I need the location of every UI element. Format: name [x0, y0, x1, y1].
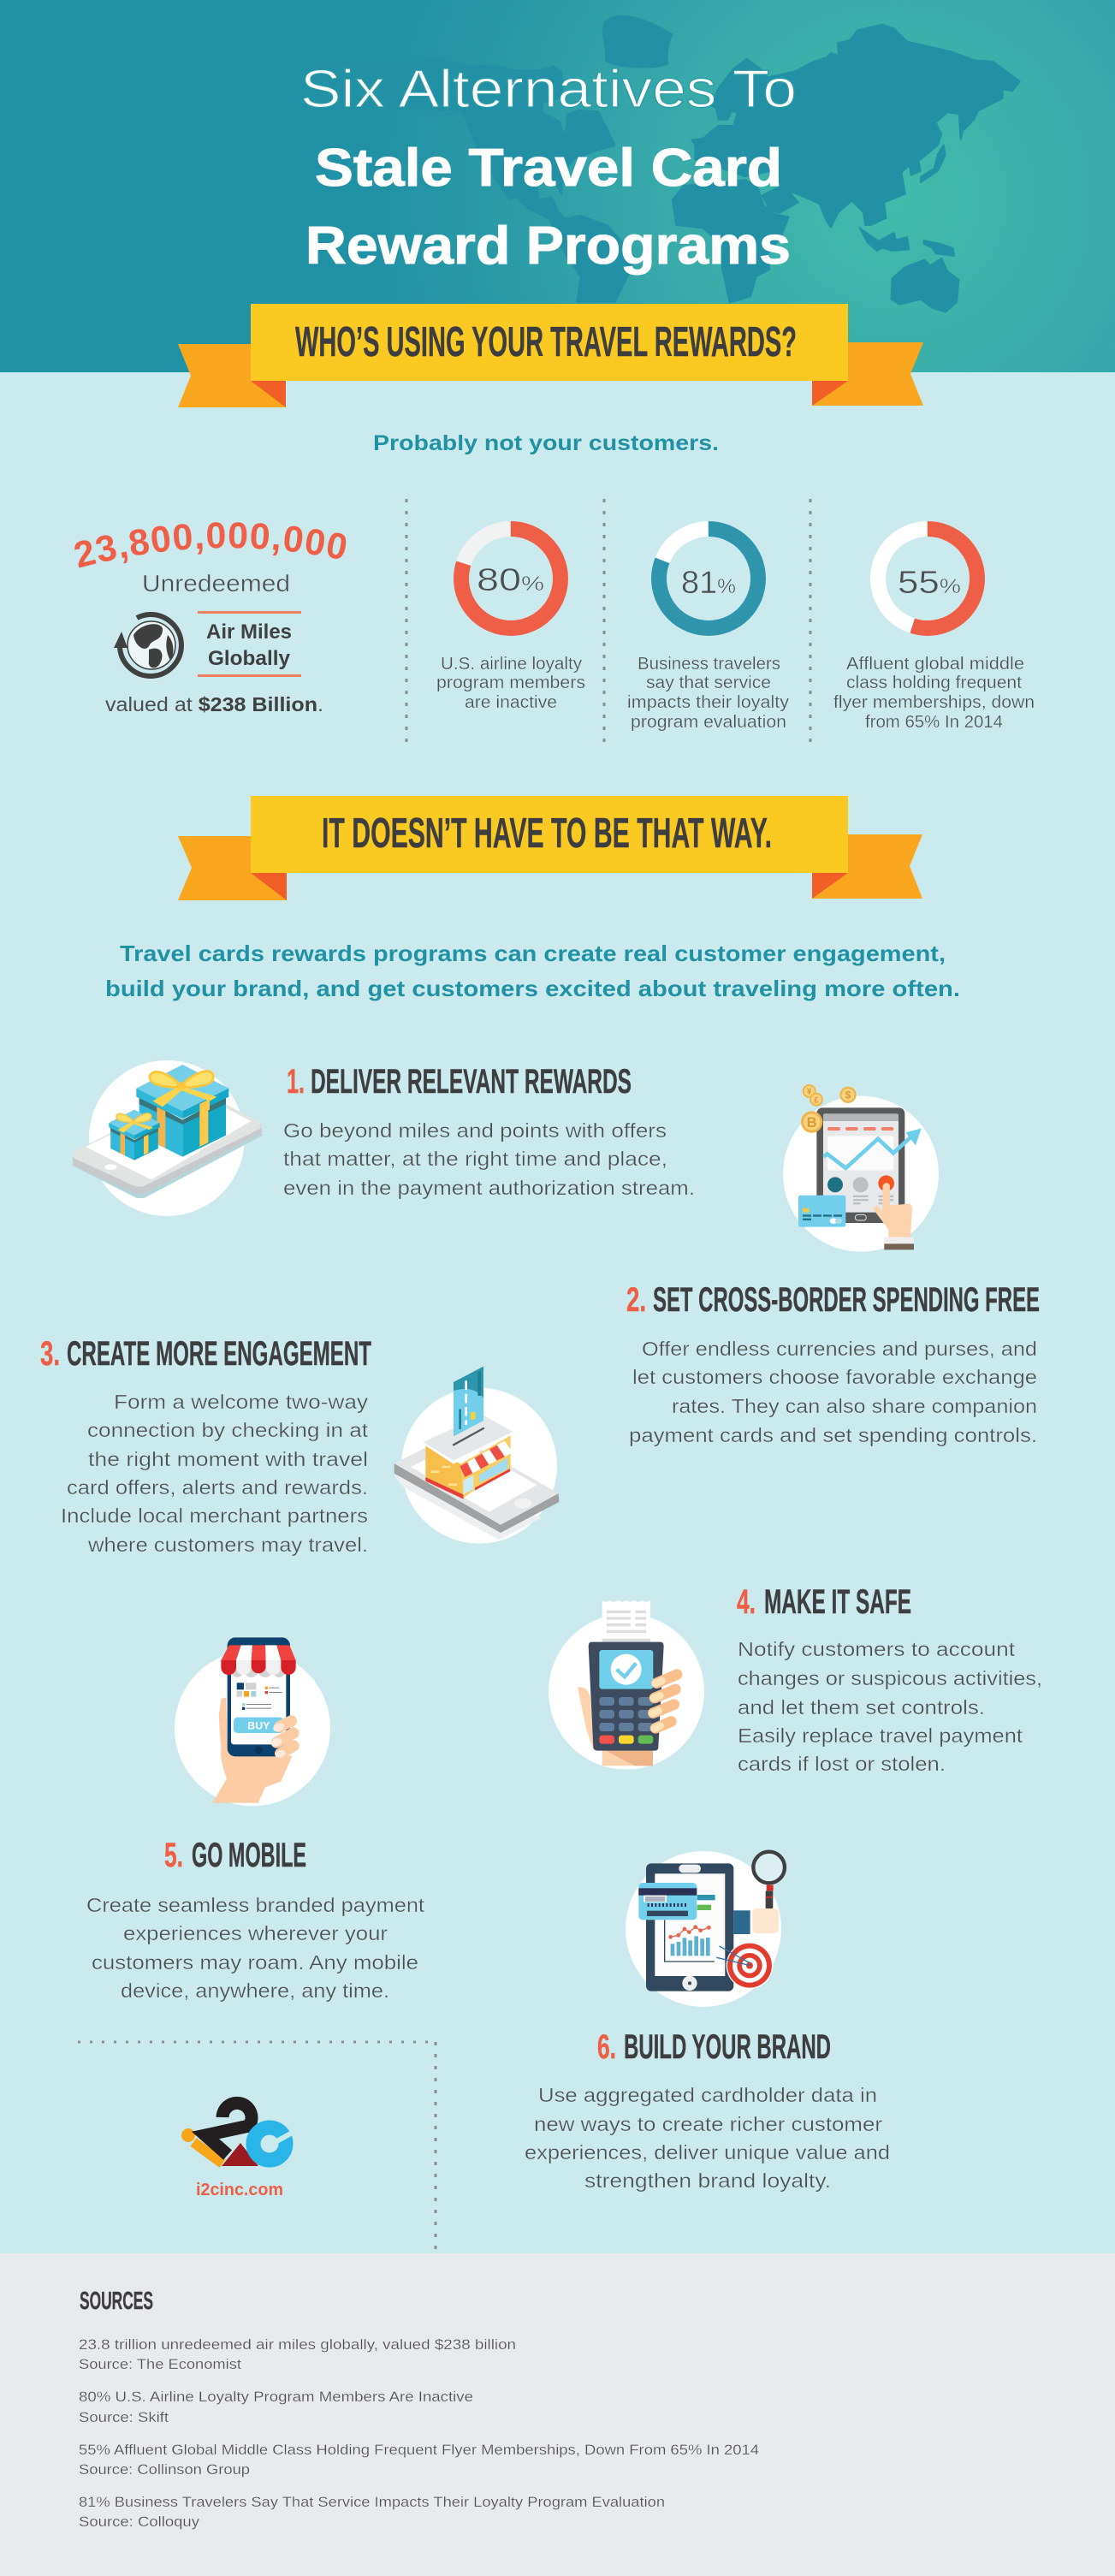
stat: 55%: class holding frequent — [846, 674, 1022, 692]
section 4: make it safe: Easily replace travel payment — [738, 1724, 1023, 1747]
section 1: deliver relevant rewards: DELIVER RELEVANT REWARDS — [311, 1063, 632, 1101]
section 3: create more engagement: 3. — [40, 1335, 60, 1373]
stat: 80% — [436, 529, 585, 712]
fingers — [652, 1675, 677, 1729]
stat: 55%: from 65% In 2014 — [865, 713, 1003, 732]
section 2: set cross-border spending free: 2. — [626, 1281, 646, 1319]
section 1: deliver relevant rewards: even in the payment authorization stream. — [283, 1177, 695, 1199]
source list: Source: Collinson Group — [79, 2461, 250, 2478]
donut chart 81 — [659, 529, 758, 628]
section 2: set cross-border spending free: let customers choose favorable exchange — [632, 1366, 1037, 1388]
stat: 55%: 55 % — [898, 565, 961, 600]
logo: i2c — [181, 2103, 295, 2199]
section 5: go mobile: GO MOBILE — [192, 1837, 306, 1874]
stat: 81%: program evaluation — [631, 713, 786, 732]
donut chart 55 — [878, 529, 977, 628]
section 3: create more engagement: Form a welcome two-way — [114, 1391, 369, 1413]
section 4: make it safe: and let them set controls. — [738, 1696, 985, 1718]
section 6: build your brand: experiences, deliver unique value and — [525, 2141, 890, 2163]
title: Six Alternatives To — [300, 60, 797, 119]
awning — [221, 1645, 296, 1675]
header panel — [0, 0, 1115, 372]
intro paragraph: Travel cards rewards programs can create real customer engagement, — [120, 941, 946, 966]
coins — [801, 1084, 857, 1133]
title — [300, 60, 797, 276]
big gift — [136, 1065, 228, 1157]
source list: Source: Colloquy — [79, 2514, 200, 2530]
section 1: deliver relevant rewards: that matter, at the right time and place, — [283, 1148, 667, 1170]
banner: it doesn't have to be that way: IT DOESN’T HAVE TO BE THAT WAY. — [322, 810, 772, 857]
section 1: deliver relevant rewards — [283, 1063, 695, 1199]
source list: 81% Business Travelers Say That Service Impacts Their Loyalty Program Evaluation — [79, 2494, 665, 2510]
icon: globe with arrow — [114, 614, 181, 676]
stat: 81%: say that service — [646, 674, 771, 692]
coins: B — [807, 1114, 817, 1131]
icon: payment terminal with receipt — [549, 1600, 704, 1770]
source list: 55% Affluent Global Middle Class Holding Frequent Flyer Memberships, Down From 65% In 2014 — [79, 2442, 759, 2458]
section 6: build your brand: 6. — [597, 2028, 616, 2066]
stat: 80%: 80 % — [477, 562, 544, 597]
arched number: 23,800,000,000 — [74, 522, 346, 568]
stat: 55%: Affluent global middle — [846, 655, 1024, 674]
coins: ¥ — [807, 1088, 812, 1097]
fingers — [276, 1721, 294, 1754]
subheading: probably not your customers: Probably not your customers. — [373, 431, 719, 455]
section 6: build your brand: BUILD YOUR BRAND — [624, 2028, 831, 2066]
section 5: go mobile: 5. — [164, 1837, 183, 1874]
air miles globally label — [198, 611, 301, 677]
section 6: build your brand: Use aggregated cardholder data in — [538, 2084, 877, 2106]
section 3: create more engagement: Include local merchant partners — [61, 1505, 368, 1527]
logo: i2c: i2cinc.com — [196, 2181, 283, 2199]
source list: Source: The Economist — [79, 2356, 241, 2372]
stat: 80%: U.S. airline loyalty — [441, 655, 582, 674]
section 6: build your brand: new ways to create richer customer — [534, 2113, 882, 2135]
section 4: make it safe: 4. — [737, 1583, 756, 1621]
section 5: go mobile: Create seamless branded payment — [86, 1894, 425, 1916]
icon: hand holding phone with awning — [175, 1637, 330, 1806]
stat: 81%: 81% — [681, 565, 736, 600]
air miles globally label: Air Miles — [206, 620, 292, 644]
source list: 80% U.S. Airline Loyalty Program Members Are Inactive — [79, 2389, 473, 2405]
awning — [460, 1440, 513, 1477]
section 4: make it safe: MAKE IT SAFE — [764, 1583, 911, 1621]
unredeemed label: Unredeemed — [142, 570, 290, 597]
stat: 81%: impacts their loyalty — [627, 693, 789, 712]
section 3: create more engagement: CREATE MORE ENGAGEMENT — [67, 1335, 371, 1373]
donut chart 80 — [461, 529, 560, 628]
section 2: set cross-border spending free: payment cards and set spending controls. — [629, 1424, 1037, 1446]
stat: 80%: program members — [436, 674, 585, 692]
target — [716, 1942, 773, 1989]
section 3: create more engagement — [40, 1335, 371, 1556]
credit card — [454, 1367, 483, 1436]
stat: 81%: Business travelers — [638, 655, 780, 674]
panel: sources — [0, 2253, 1115, 2576]
icon: tablet with analytics, magnifier and target — [626, 1851, 785, 2007]
title: Reward Programs — [305, 217, 791, 276]
section 3: create more engagement: the right moment with travel — [88, 1448, 368, 1470]
icon: storefront on phone with card — [394, 1367, 559, 1544]
stat: 80%: are inactive — [465, 693, 557, 712]
section 1: deliver relevant rewards: 1. — [287, 1063, 305, 1101]
section 3: create more engagement: where customers may travel. — [87, 1534, 368, 1556]
stat panel: unredeemed air miles — [74, 522, 346, 715]
hand and magnifier — [733, 1852, 785, 1934]
stat: 81% — [627, 529, 789, 732]
card — [638, 1883, 697, 1920]
section 6: build your brand: strengthen brand loyalty. — [584, 2169, 831, 2192]
section 2: set cross-border spending free — [626, 1281, 1040, 1446]
icon: gifts on phone — [72, 1060, 263, 1216]
source list: Source: Skift — [79, 2409, 169, 2425]
world map — [313, 16, 1020, 312]
title: Stale Travel Card — [315, 139, 782, 198]
section 6: build your brand — [525, 2028, 890, 2192]
icon: tablet with chart and coins — [783, 1084, 939, 1252]
section 5: go mobile — [86, 1837, 425, 2002]
section 5: go mobile: experiences wherever your — [123, 1922, 388, 1944]
intro paragraph: build your brand, and get customers excited about traveling more often. — [105, 976, 960, 1001]
banner: it doesn't have to be that way — [178, 796, 922, 900]
section 3: create more engagement: connection by checking in at — [87, 1419, 369, 1441]
icon: hand holding phone with awning: BUY — [247, 1719, 270, 1731]
valued at: valued at $238 Billion . — [105, 693, 323, 715]
stat: 55%: flyer memberships, down — [833, 693, 1035, 712]
coins: £ — [814, 1095, 819, 1105]
section 2: set cross-border spending free: Offer endless currencies and purses, and — [642, 1338, 1037, 1360]
section 1: deliver relevant rewards: Go beyond miles and points with offers — [283, 1119, 667, 1142]
air miles globally label: Globally — [208, 647, 291, 670]
section 5: go mobile: device, anywhere, any time. — [121, 1979, 389, 2002]
stat: 55% — [833, 529, 1035, 732]
section 4: make it safe: Notify customers to account — [738, 1638, 1016, 1660]
section 2: set cross-border spending free: rates. They can also share companion — [672, 1395, 1037, 1417]
small gift — [109, 1110, 160, 1160]
section 4: make it safe: cards if lost or stolen. — [738, 1753, 946, 1775]
section 4: make it safe — [737, 1583, 1042, 1775]
source list — [79, 2336, 759, 2530]
source list: 23.8 trillion unredeemed air miles globally, valued $238 billion — [79, 2336, 516, 2353]
intro paragraph — [105, 941, 960, 1001]
coins: $ — [845, 1089, 851, 1101]
section 3: create more engagement: card offers, alerts and rewards. — [67, 1476, 368, 1499]
section 4: make it safe: changes or suspicous activities, — [738, 1667, 1042, 1689]
section 5: go mobile: customers may roam. Any mobile — [92, 1951, 418, 1974]
sources heading: SOURCES — [80, 2288, 153, 2315]
banner: who's using your travel rewards — [178, 304, 923, 407]
